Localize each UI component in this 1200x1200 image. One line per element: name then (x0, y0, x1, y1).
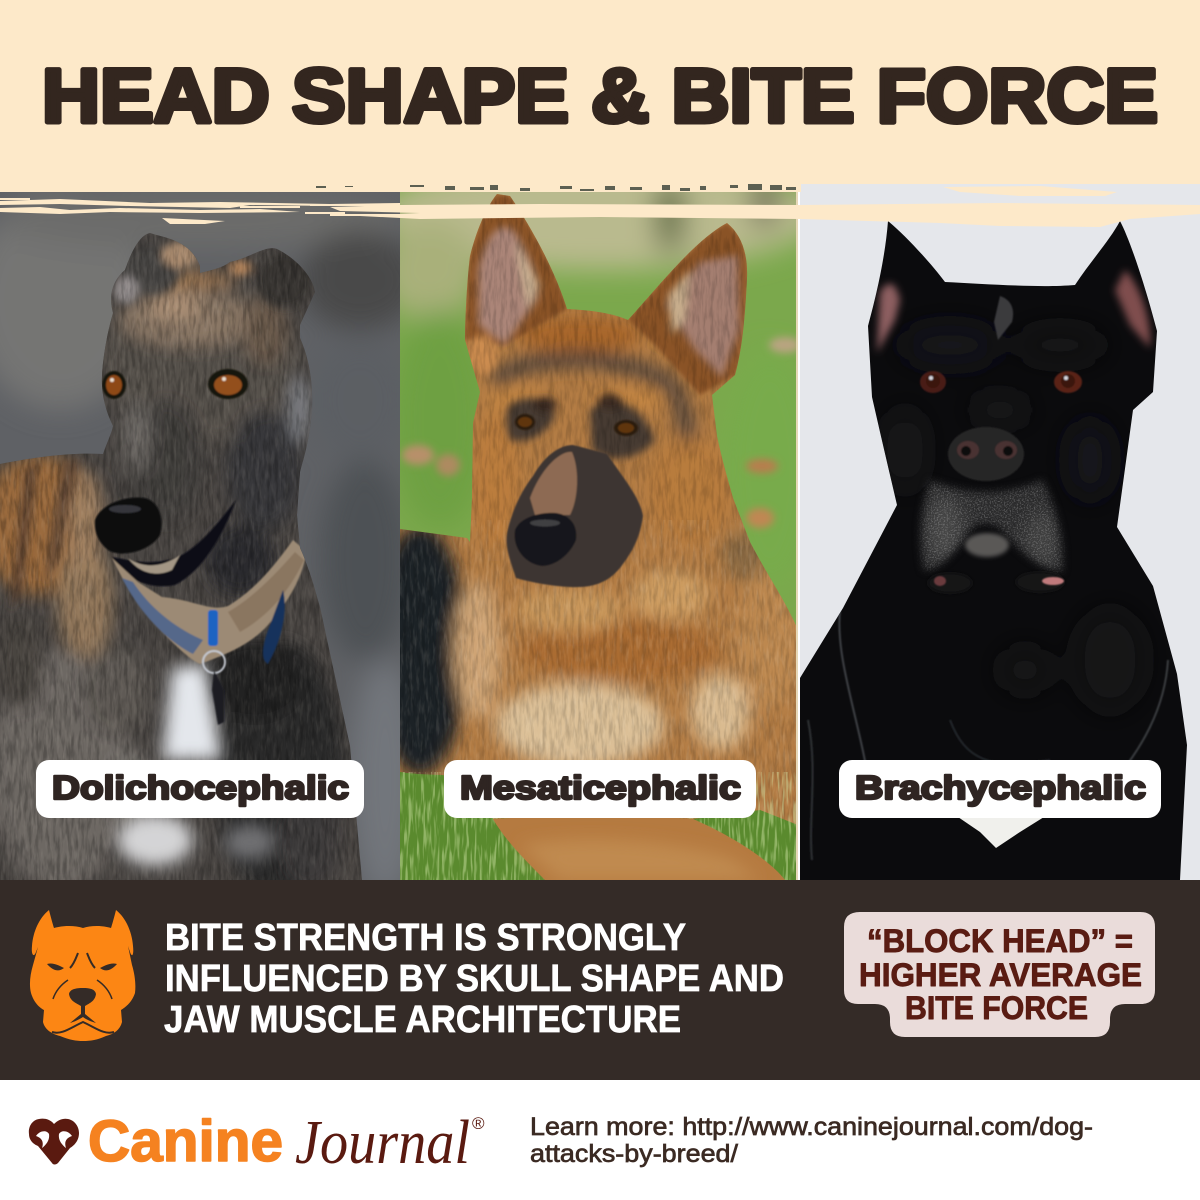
summary text: BITE STRENGTH IS STRONGLY (165, 917, 686, 959)
panel: brachycephalic cane corso photo (798, 183, 1200, 880)
label: mesaticephalic (444, 760, 756, 818)
grass foreground (400, 772, 798, 880)
title: HEAD SHAPE & BITE FORCE (42, 54, 1158, 139)
label: brachycephalic (839, 760, 1161, 818)
registered mark: ® (472, 1114, 485, 1133)
white chest patch (958, 817, 1044, 848)
cane corso figure (798, 200, 1200, 880)
panel: dark summary band (0, 880, 1200, 1080)
logo wordmark: Journal: Journal (295, 1109, 470, 1177)
learn more link text: attacks-by-breed/ (530, 1140, 738, 1168)
panel: mesaticephalic german shepherd photo (400, 192, 798, 880)
summary text (164, 917, 784, 1041)
icon: pit bull head (30, 910, 135, 1041)
panel: dolichocephalic greyhound photo (0, 190, 420, 900)
label: mesaticephalic: Mesaticephalic (460, 769, 741, 806)
eyes (102, 371, 126, 399)
summary text: JAW MUSCLE ARCHITECTURE (164, 999, 681, 1041)
learn more link text (530, 1113, 1093, 1168)
summary text: INFLUENCED BY SKULL SHAPE AND (165, 958, 784, 1000)
callout: block head: “BLOCK HEAD” = (867, 923, 1133, 959)
brush stroke specks on photo top edge (316, 184, 796, 191)
label: brachycephalic: Brachycephalic (855, 769, 1146, 806)
collar (112, 540, 307, 664)
label: dolichocephalic (36, 760, 364, 818)
label: dolichocephalic: Dolichocephalic (52, 769, 349, 806)
greyhound figure (0, 233, 362, 880)
learn more link text: Learn more: http://www.caninejournal.com/dog- (530, 1113, 1093, 1141)
callout: block head (844, 912, 1155, 1037)
title banner background (0, 0, 1200, 192)
icon: canine journal heart nose logo (29, 1119, 79, 1164)
footer background (0, 1080, 1200, 1200)
shepherd figure (400, 194, 796, 824)
logo wordmark: Canine: Canine (88, 1109, 283, 1174)
brush stroke divider (0, 183, 1200, 227)
callout: block head: HIGHER AVERAGE (859, 957, 1142, 993)
muzzle (916, 478, 1067, 574)
panel edge line (796, 190, 798, 880)
callout: block head: BITE FORCE (905, 990, 1088, 1026)
